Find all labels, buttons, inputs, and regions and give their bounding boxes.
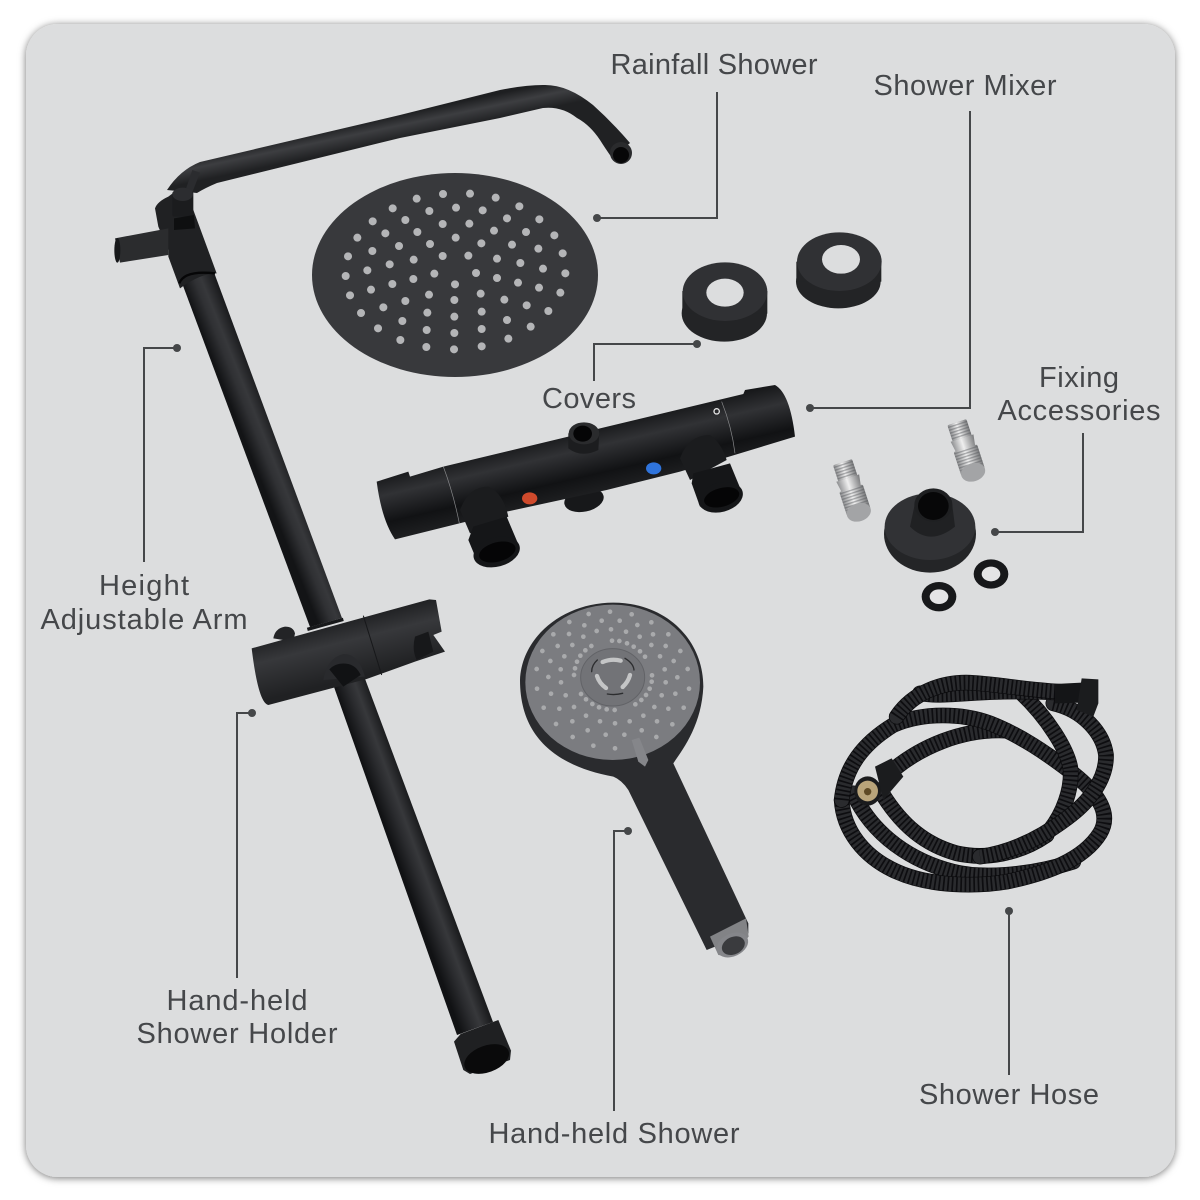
slider holder [252,599,445,705]
mixer legs [460,487,508,533]
centre spray arcs [592,658,634,695]
flow icon [714,409,719,414]
T connector [114,170,217,288]
covers [682,232,882,342]
grey spray face [525,605,700,760]
right hex nut [692,463,746,517]
shower hose [842,678,1106,885]
label: Hand-held Shower Holder: Shower Holder [136,1018,338,1050]
hot marker [522,492,537,504]
label: Fixing Accessories: Accessories [998,395,1160,427]
brass connector [854,758,903,806]
arm end nipple [610,142,632,164]
cold marker [646,462,661,474]
lower pipe end cap [454,1020,513,1080]
centre disc [581,649,645,706]
label: Height Adjustable Arm [40,344,248,636]
hose nut end [1055,678,1098,717]
label: Hand-held Shower: Hand-held Shower [488,1118,740,1150]
label: Fixing Accessories [991,362,1160,536]
top outlet [568,422,599,454]
label: Rainfall Shower [593,49,818,222]
washers [922,582,956,611]
label: Hand-held Shower [488,827,740,1150]
chrome fitting left [831,458,873,525]
label: Fixing Accessories: Fixing [1039,362,1119,394]
label: Shower Mixer: Shower Mixer [874,70,1057,102]
label: Shower Mixer [806,70,1057,412]
label: Height Adjustable Arm: Height [99,570,189,602]
spray nozzles [537,612,689,748]
fixing accessories [831,418,1008,611]
label: Covers [542,340,701,415]
hook [632,738,648,767]
label: Shower Hose [919,907,1099,1111]
lower riser pipe [328,660,493,1035]
hand-held shower [520,603,752,962]
nozzles [346,194,565,349]
left hex nut [468,517,523,572]
label: Hand-held Shower Holder: Hand-held [166,985,308,1017]
shower mixer [377,385,795,572]
threaded outlet [710,918,749,957]
shower column with overhead arm and holder [114,85,632,1080]
upper riser pipe [182,267,342,627]
label: Covers: Covers [542,383,636,415]
chrome fitting right [945,418,988,485]
wall flange [884,495,976,573]
label: Height Adjustable Arm: Adjustable Arm [40,604,248,636]
label: Hand-held Shower Holder [136,709,338,1050]
label: Rainfall Shower: Rainfall Shower [610,49,818,81]
label: Shower Hose: Shower Hose [919,1079,1099,1111]
rainfall shower head [312,173,598,377]
overhead arm [167,85,630,193]
